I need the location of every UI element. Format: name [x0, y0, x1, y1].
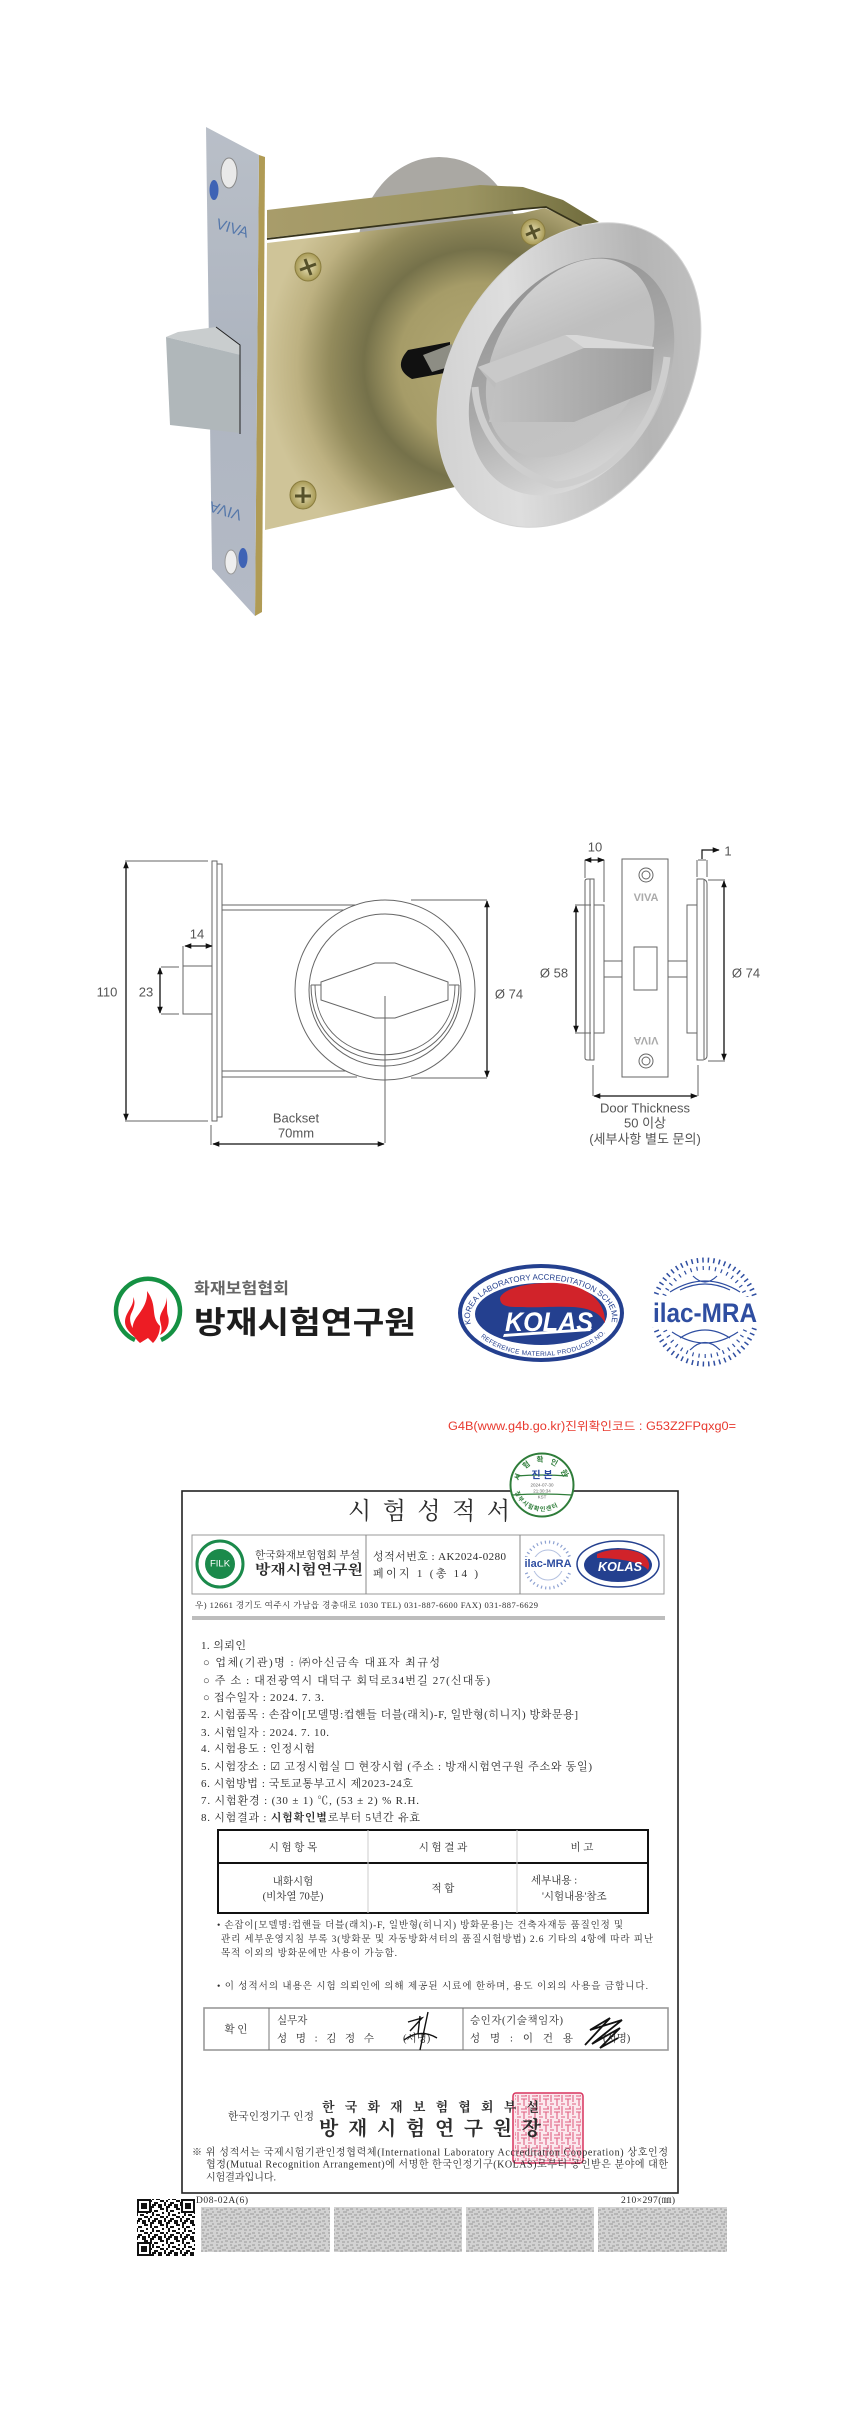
case screw 2 — [521, 219, 545, 245]
test information list: 1. 의뢰인 — [201, 1638, 246, 1652]
confirmation text: (서명) — [603, 2032, 631, 2044]
confirmation text: 성 명 : 이 건 용 — [470, 2032, 573, 2044]
test information list: 3. 시험일자 : 2024. 7. 10. — [201, 1725, 329, 1739]
table row: 내화시험 — [273, 1874, 313, 1888]
table header — [269, 1840, 593, 1854]
dimension 10 — [585, 840, 604, 902]
white band — [650, 1297, 760, 1327]
small ilac logo: ilac-MRA — [524, 1558, 572, 1570]
report number: 성적서번호 : AK2024-0280 — [373, 1549, 506, 1563]
dimension 23 — [139, 967, 179, 1014]
verification stamp: 정부시험확인센터 — [515, 1490, 558, 1512]
lock case top rim — [267, 185, 599, 238]
note paragraph: 목적 이외의 방화문에만 사용이 가능함. — [221, 1947, 397, 1959]
dimension door thickness: 50 이상 — [624, 1116, 666, 1130]
dimension diameter 58: Ø 58 — [540, 966, 568, 980]
test information list: ○ 접수일자 : 2024. 7. 3. — [203, 1690, 324, 1704]
form number: D08-02A(6) — [196, 2195, 248, 2206]
test information list: 6. 시험방법 : 국토교통부고시 제2023-24호 — [201, 1776, 413, 1790]
ring pull — [475, 357, 667, 485]
table header: 시 험 결 과 — [419, 1840, 468, 1854]
confirmation text: 승인자(기술책임자) — [470, 2014, 564, 2026]
2D security barcode blocks — [201, 2207, 727, 2252]
table row: 적 합 — [432, 1882, 455, 1894]
ring text bottom: REFERENCE MATERIAL PRODUCER NO. — [481, 1332, 606, 1356]
dimension 10: 10 — [588, 840, 602, 854]
logo: KOLAS — [458, 1264, 624, 1362]
test information list: ○ 업체(기관)명 : ㈜아신금속 대표자 최규성 — [203, 1655, 440, 1669]
confirmation table — [204, 2008, 668, 2050]
VIVA label top: VIVA — [634, 892, 658, 904]
verification stamp: 21:30:34 — [533, 1488, 551, 1494]
icon: green ring with flames — [116, 1279, 180, 1343]
accreditation note — [192, 2146, 668, 2184]
test report document — [181, 1452, 679, 2194]
test information list — [201, 1638, 592, 1824]
right handle — [668, 879, 707, 1060]
arcs — [670, 1276, 740, 1350]
report number — [373, 1549, 506, 1580]
institute name: 한국화재보험협회 부설 — [255, 1548, 360, 1562]
header table — [192, 1535, 664, 1594]
flip handle — [478, 335, 654, 422]
handle outline — [321, 963, 448, 1018]
table row: '시험내용'참조 — [542, 1890, 607, 1902]
dimension 14 — [183, 926, 212, 966]
latch outline — [183, 966, 212, 1014]
ring text top: KOREA LABORATORY ACCREDITATION SCHEME — [464, 1274, 618, 1324]
accreditation label: 한국인정기구 인정 — [228, 2110, 314, 2122]
institute name: 방재시험연구원 — [255, 1562, 363, 1578]
logo: ilac-MRA — [650, 1260, 760, 1364]
verification stamp: KST — [538, 1494, 547, 1500]
dimension 14: 14 — [190, 926, 204, 942]
verification code line: G4B(www.g4b.go.kr)진위확인코드 : G53Z2FPqxg0= — [448, 1420, 736, 1433]
note paragraph: • 손잡이[모델명:컵핸들 더블(래치)-F, 일반형(히니지) 방화문용]는 건축자재등 품질인정 및 — [217, 1919, 623, 1931]
dimension door thickness — [589, 1065, 701, 1146]
issuer block — [228, 2093, 583, 2163]
front escutcheon — [383, 174, 755, 576]
dimension 1 — [697, 844, 732, 877]
wordmark: KOLAS — [505, 1307, 593, 1337]
blue sticker bottom — [238, 548, 248, 568]
note paragraph: 관리 세부운영지침 부록 3(방화문 및 자동방화셔터의 품질시험방법) 2.6 기타의 4항에 따라 피난 — [221, 1933, 654, 1945]
table header: 비 고 — [571, 1840, 593, 1854]
ring outline — [311, 985, 459, 1060]
signature 2 — [585, 2018, 622, 2048]
institute name — [255, 1548, 363, 1578]
dimension drawing: side view — [540, 840, 760, 1146]
dimension 110: 110 — [97, 984, 117, 1000]
confirmation text: 실무자 — [277, 2014, 308, 2026]
note paragraph: • 이 성적서의 내용은 시험 의뢰인에 의해 제공된 시료에 한하며, 용도 이외의 사용을 금합니다. — [217, 1980, 648, 1992]
test information list: 5. 시험장소 : ☑ 고정시험실 ☐ 현장시험 (주소 : 방재시험연구원 주소와 동일) — [201, 1759, 592, 1773]
product photo: sliding door flush pull lock — [166, 127, 755, 616]
plate screw hole top — [221, 158, 237, 188]
FILK emblem — [197, 1541, 243, 1587]
case screw 1 — [295, 253, 321, 281]
confirmation text: 성 명 : 김 정 수 — [277, 2032, 374, 2044]
large heading: 방재시험연구원 — [194, 1306, 416, 1340]
wordmark: ilac-MRA — [653, 1298, 757, 1328]
verification stamp: 진 본 — [531, 1470, 553, 1482]
confirmation text — [225, 2014, 631, 2044]
small KOLAS logo: KOLAS — [598, 1559, 642, 1574]
table row: 세부내용 : — [531, 1874, 577, 1886]
address line: 우) 12661 경기도 여주시 가남읍 경충대로 1030 TEL) 031-887-6600 FAX) 031-887-6629 — [195, 1600, 538, 1610]
VIVA mark bottom: VIVA — [207, 497, 244, 523]
dimension door thickness: Door Thickness — [600, 1100, 691, 1116]
VIVA mark top: VIVA — [214, 216, 251, 242]
case screw 3 — [290, 481, 316, 509]
accreditation note: 협정(Mutual Recognition Arrangement)에 서명한 한국인정기구(KOLAS)로부터 공인받은 분야에 대한 — [206, 2158, 668, 2170]
dimension 110 — [97, 861, 208, 1121]
blue sticker top — [210, 180, 218, 200]
document border — [182, 1491, 678, 2193]
escutcheon circles — [295, 900, 475, 1080]
plate screw hole bottom — [225, 550, 237, 574]
test information list: ○ 주 소 : 대전광역시 대덕구 회덕로34번길 27(신대동) — [203, 1673, 490, 1687]
dimension diameter 74 — [708, 880, 760, 1061]
dimension drawing: front view — [97, 861, 523, 1145]
verification stamp — [510, 1452, 574, 1518]
back escutcheon disc — [358, 157, 520, 343]
forend plate — [206, 127, 259, 616]
VIVA label bottom: VIVA — [634, 1034, 658, 1046]
dimension diameter 74: Ø 74 — [732, 966, 760, 980]
paper size: 210×297(㎜) — [621, 2195, 675, 2206]
seal — [513, 2093, 583, 2163]
table header: 시 험 항 목 — [269, 1840, 317, 1854]
dimension backset — [211, 996, 385, 1145]
report number: 페이지 1 (총 14 ) — [373, 1566, 478, 1580]
table row: (비차열 70분) — [263, 1890, 324, 1902]
test information list: 7. 시험환경 : (30 ± 1) ℃, (53 ± 2) % R.H. — [201, 1793, 419, 1807]
logo: fire insurance association research institute — [116, 1279, 416, 1343]
case top seam — [267, 207, 582, 239]
FILK emblem: FILK — [210, 1558, 231, 1570]
gray divider bar — [192, 1616, 665, 1620]
red swoosh — [500, 1283, 605, 1323]
title: 시 험 성 적 서 — [348, 1498, 510, 1525]
verification stamp: 시 험 확 인 원 — [514, 1456, 569, 1480]
dimension diameter 58 — [540, 905, 591, 1033]
confirmation text: (서명) — [403, 2032, 431, 2044]
small KOLAS logo — [577, 1541, 659, 1587]
dimension 1: 1 — [724, 844, 732, 858]
forend edge — [255, 155, 265, 616]
result table — [218, 1830, 648, 1913]
dimension 23: 23 — [139, 984, 153, 1000]
QR code — [137, 2199, 195, 2256]
table row — [263, 1874, 607, 1902]
verification stamp: 2024-07-30 — [530, 1482, 554, 1488]
confirmation text: 확 인 — [225, 2022, 247, 2036]
center face plate — [622, 859, 668, 1077]
small heading: 화재보험협회 — [194, 1280, 289, 1298]
test information list: 2. 시험품목 : 손잡이[모델명:컵핸들 더블(래치)-F, 일반형(히니지) 방화문용] — [201, 1707, 578, 1721]
latch bolt — [166, 327, 240, 434]
test information list: 4. 시험용도 : 인정시험 — [201, 1741, 315, 1755]
note paragraph — [217, 1919, 654, 1992]
spindle slot — [401, 342, 452, 379]
dimension diameter 74 — [411, 900, 523, 1078]
dimension door thickness: (세부사항 별도 문의) — [589, 1132, 701, 1146]
dimension diameter 74: Ø 74 — [495, 986, 523, 1002]
dimension backset: 70mm — [278, 1126, 314, 1140]
test information list: 8. 시험결과 : 시험확인별로부터 5년간 유효 — [201, 1810, 420, 1824]
issuer name: 한 국 화 재 보 험 협 회 부 설 — [322, 2100, 539, 2114]
accreditation note: ※ 위 성적서는 국제시험기관인정협력체(International Laboratory Accreditation Cooperation) 상호인정 — [192, 2146, 668, 2158]
small ilac logo — [523, 1542, 573, 1588]
director title: 방 재 시 험 연 구 원 장 — [319, 2116, 542, 2140]
dimension backset: Backset — [273, 1110, 320, 1126]
plate outline — [212, 861, 222, 1121]
accreditation note: 시험결과입니다. — [206, 2170, 276, 2184]
lock case body — [265, 208, 605, 530]
left handle — [585, 879, 622, 1060]
signature 1 — [404, 2012, 437, 2050]
case lines — [222, 905, 357, 1077]
